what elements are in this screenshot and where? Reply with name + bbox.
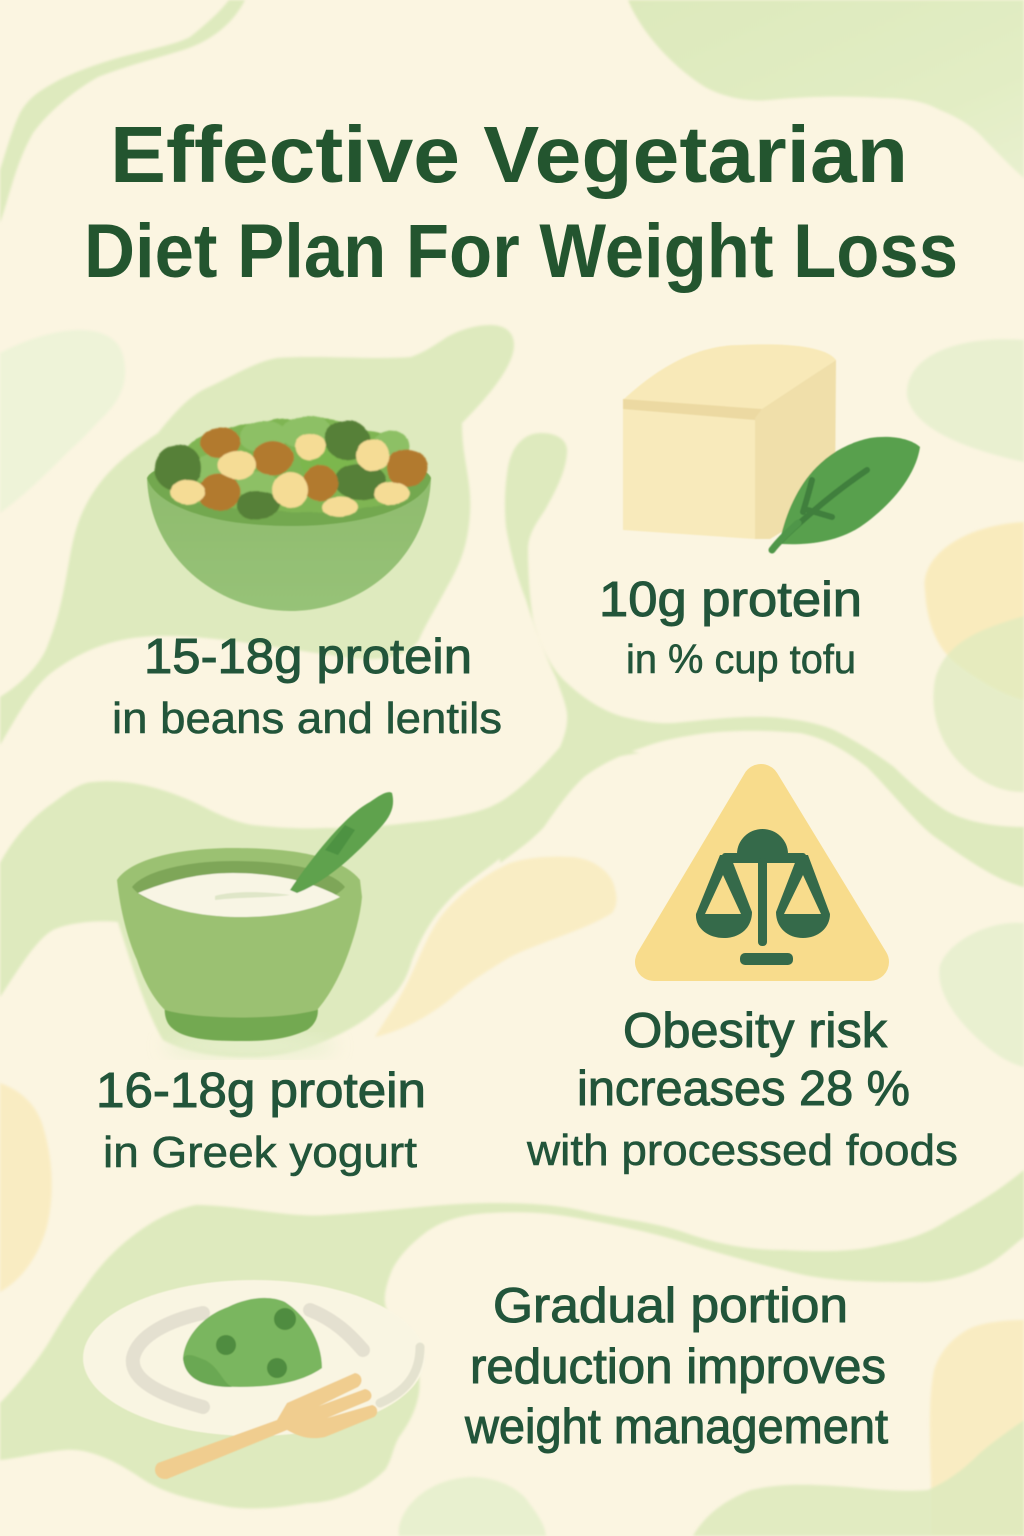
icon: yogurt bowl bbox=[117, 792, 393, 1041]
center blob behind bean bowl bbox=[0, 325, 514, 745]
lower blob behind yogurt bowl bbox=[0, 740, 640, 1057]
title: Diet Plan For Weight Loss bbox=[84, 209, 958, 294]
label: in Greek yogurt: in Greek yogurt bbox=[103, 1128, 417, 1177]
label: weight management: weight management bbox=[464, 1400, 888, 1454]
soft fade under the yogurt bowl bbox=[165, 1036, 335, 1056]
bottom band and plate backdrop bbox=[0, 1170, 1024, 1508]
icon: warning triangle with scales bbox=[654, 783, 870, 965]
title: Effective Vegetarian bbox=[110, 110, 908, 199]
label: reduction improves: reduction improves bbox=[470, 1340, 886, 1394]
label: Obesity risk: Obesity risk bbox=[623, 1004, 888, 1058]
icon: tofu and leaf bbox=[623, 344, 920, 550]
icon: plate with food and fork bbox=[83, 1280, 425, 1479]
panel: portion reduction bbox=[83, 1279, 888, 1479]
title bbox=[84, 110, 958, 294]
panel: obesity risk bbox=[526, 783, 958, 1175]
label: 16-18g protein: 16-18g protein bbox=[96, 1064, 426, 1118]
label: 10g protein: 10g protein bbox=[599, 573, 862, 627]
label: in % cup tofu: in % cup tofu bbox=[626, 636, 856, 682]
label: in beans and lentils: in beans and lentils bbox=[112, 694, 502, 743]
label: Gradual portion: Gradual portion bbox=[493, 1279, 848, 1333]
icon: bean bowl bbox=[147, 416, 431, 611]
label: increases 28 %: increases 28 % bbox=[577, 1062, 910, 1116]
panel: tofu bbox=[599, 344, 920, 682]
label: 15-18g protein: 15-18g protein bbox=[144, 630, 472, 684]
label: with processed foods: with processed foods bbox=[526, 1126, 958, 1175]
finger band and right stripe bbox=[500, 433, 1024, 887]
panel: beans and lentils bbox=[112, 416, 502, 743]
panel: Greek yogurt bbox=[96, 792, 426, 1177]
